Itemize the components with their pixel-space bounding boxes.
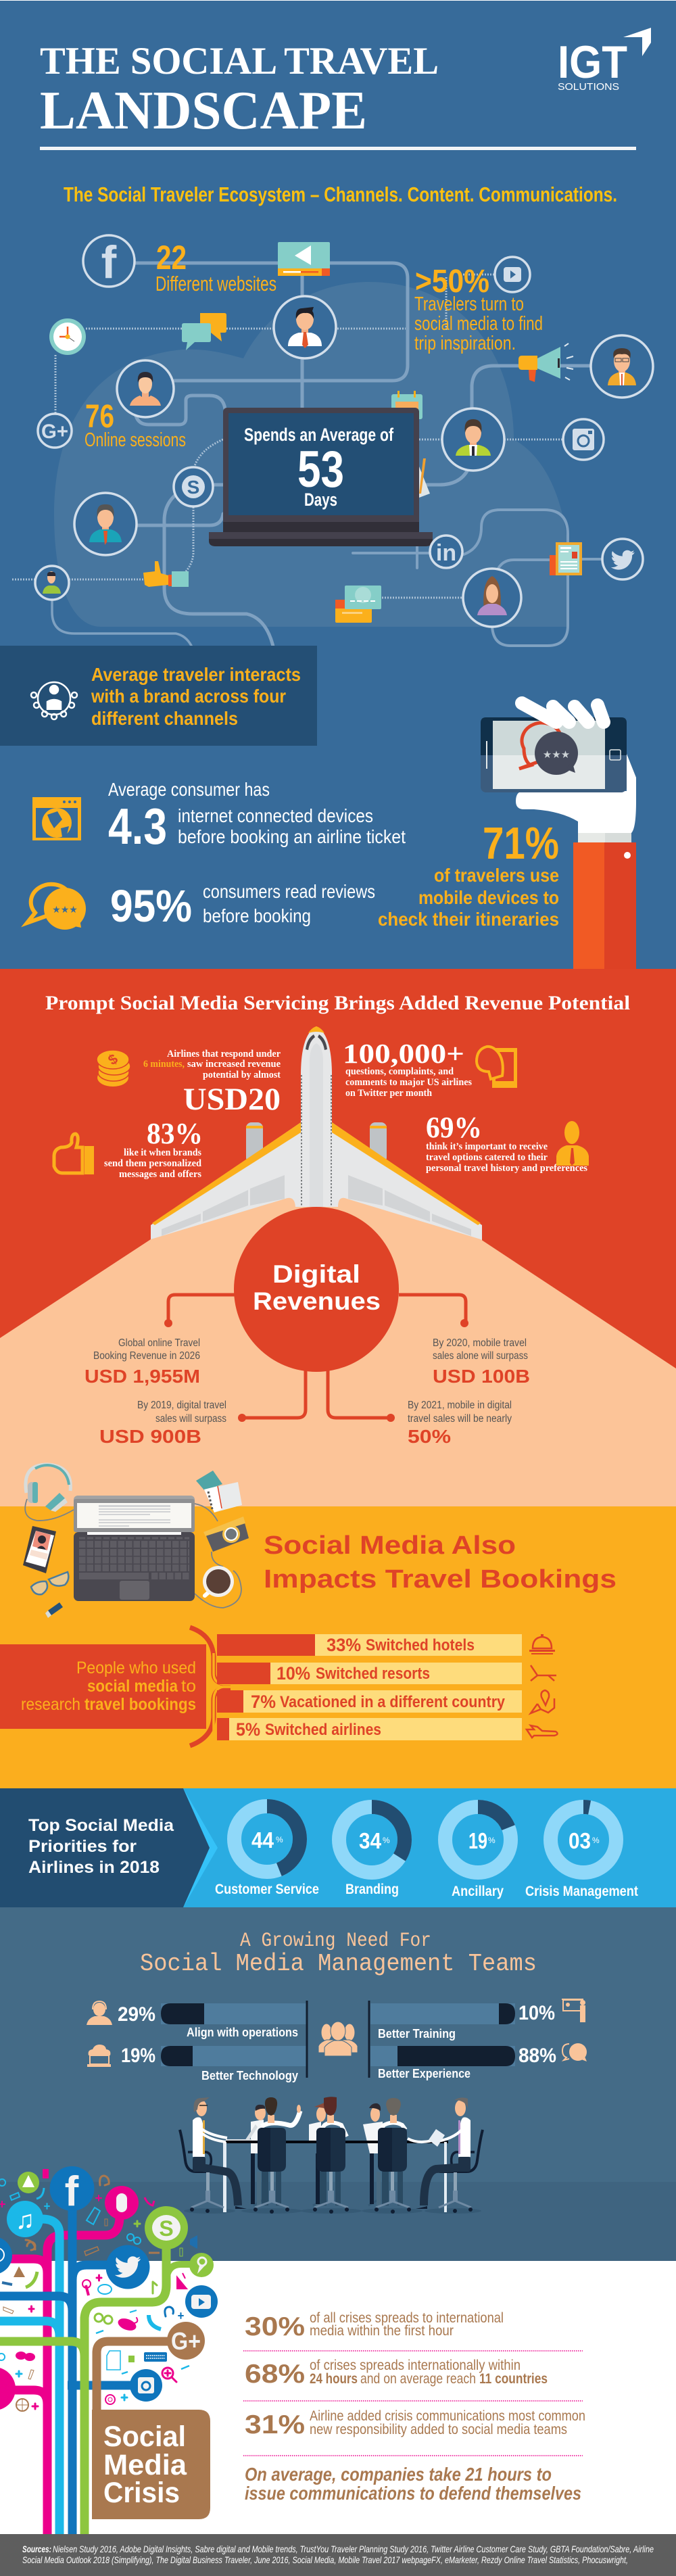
- icon: chat: [562, 2043, 587, 2061]
- footer: sources: [0, 2534, 676, 2576]
- icon: megaphone: [518, 343, 573, 382]
- icon: skype: S: [159, 2216, 174, 2241]
- heading: Top Social Media: [28, 1816, 174, 1835]
- label: social media crisis: Social: [103, 2420, 186, 2453]
- icon: mouse: [105, 2186, 139, 2220]
- icon: video play: [185, 2285, 218, 2318]
- donut: crisis management 03%: %: [592, 1836, 600, 1845]
- icon: google plus: [167, 2322, 205, 2360]
- bar: switched resorts: 10%: [276, 1663, 310, 1684]
- bar: align with operations 29%: 29%: [118, 2003, 155, 2026]
- stat: 83%: send them personalized: [104, 1158, 202, 1169]
- icon: calendar: [391, 391, 422, 419]
- title: [40, 40, 636, 150]
- bar chart: switching behaviour: [217, 1634, 558, 1740]
- stat: 4.3 devices: before booking an airline ticket: [178, 826, 406, 847]
- stat: 4.3 devices: 4.3: [108, 798, 167, 855]
- callout: who used social media: People who used: [76, 1659, 196, 1677]
- illustration: desk flat lay: [23, 1464, 249, 1618]
- icon: headphones: [26, 1464, 70, 1512]
- icon: cloud laptop: [87, 2045, 111, 2067]
- icon: review bubbles: [27, 884, 86, 930]
- icon: facebook circle: f: [101, 237, 117, 288]
- stat: 22 different websites: Different websites: [155, 272, 276, 295]
- icon: left pink circle: [0, 2367, 16, 2410]
- stat: 30%: of all crises spreads to international: [310, 2310, 504, 2326]
- stat: 95% read reviews: before booking: [203, 905, 311, 926]
- connector lines: [12, 263, 603, 649]
- donut: branding 34%: %: [383, 1836, 390, 1845]
- stat: 71% mobile: of travelers use: [434, 865, 559, 886]
- table: [225, 2141, 448, 2143]
- bar: vacationed elsewhere: 7%: [251, 1692, 276, 1712]
- stat: USD 1,955M: Booking Revenue in 2026: [93, 1350, 200, 1362]
- stat: 100,000+: on Twitter per month: [345, 1088, 433, 1099]
- stat: USD 900B: [99, 1400, 226, 1447]
- icon: boarding cards: [335, 586, 381, 623]
- title: LANDSCAPE: [40, 81, 367, 141]
- icon: music: ♫: [16, 2206, 34, 2235]
- coffee cup: [203, 1566, 234, 1597]
- stat: 31%: [245, 2408, 585, 2439]
- icon: linkedin circle: [430, 535, 462, 568]
- bar: better experience 88%: 88%: [518, 2045, 556, 2067]
- stat: 95% read reviews: 95%: [110, 881, 192, 932]
- heading: A Growing Need For: [240, 1930, 431, 1953]
- icon: twitter: [105, 2245, 150, 2289]
- stat: 50%: 50%: [408, 1426, 451, 1447]
- stat: 68%: 24 hours: [310, 2371, 358, 2387]
- illustration: hand holding phone: [481, 703, 636, 969]
- donut: branding 34%: [339, 1807, 404, 1897]
- icon: support agent: [87, 2001, 112, 2025]
- callout: four channels: [0, 646, 317, 746]
- panel: social media priorities: [0, 1788, 676, 1907]
- stat: 95% read reviews: [27, 881, 375, 932]
- person: man in green: [442, 408, 504, 471]
- stat: 83%: messages and offers: [119, 1169, 201, 1180]
- bar: switched hotels: 33%: [327, 1635, 361, 1655]
- statement: 21 hours: [245, 2464, 581, 2504]
- donut: customer service 44%: Customer Service: [215, 1882, 319, 1897]
- heading: Social Media Also: [264, 1531, 516, 1560]
- stat: USD 1,955M: [84, 1337, 200, 1387]
- label: social media crisis: Crisis: [103, 2477, 180, 2509]
- icon: skype: [145, 2206, 188, 2249]
- bar: switched resorts: [217, 1663, 522, 1684]
- chair and person: back right: [375, 2098, 411, 2214]
- logo: IGT Solutions: SOLUTIONS: [558, 81, 619, 93]
- bar: better training 10%: [370, 1999, 585, 2041]
- panel: travel bookings: [0, 1464, 676, 1788]
- stat: 69%: think it’s important to receive: [426, 1141, 548, 1152]
- heading: [140, 1930, 537, 1978]
- panel: header and ecosystem: [0, 1, 676, 969]
- icon: facebook: [50, 2166, 95, 2215]
- donut: crisis management 03%: Crisis Management: [525, 1884, 638, 1899]
- heading: Prompt Social Media Servicing Brings Added Revenue Potential: [45, 992, 630, 1014]
- stat: 71% mobile: mobile devices to: [418, 887, 559, 908]
- digital revenues circle: Digital: [272, 1260, 360, 1288]
- callout: who used social media: research: [21, 1695, 80, 1714]
- stat: USD20: Airlines that respond under: [167, 1049, 281, 1059]
- illustration: hand holding phone: ★★★: [543, 749, 570, 761]
- callout: four channels: with a brand across four: [91, 686, 286, 707]
- icon: twitter circle: [602, 539, 643, 579]
- stat: 68%: 68%: [245, 2360, 305, 2389]
- stat: 68%: 11 countries: [479, 2371, 548, 2387]
- heading: Priorities for: [28, 1837, 137, 1856]
- icon: network person: [31, 682, 77, 719]
- icon: thumbs up: [143, 561, 189, 587]
- donut: customer service 44%: [215, 1807, 319, 1897]
- donut: customer service 44%: %: [276, 1835, 283, 1844]
- usb stick: [45, 1602, 63, 1618]
- donut: ancillary 19%: %: [488, 1836, 496, 1845]
- title: THE SOCIAL TRAVEL: [40, 40, 439, 82]
- stat: 69%: 69%: [426, 1111, 482, 1144]
- stat: 31%: 31%: [245, 2410, 305, 2439]
- stat: 83%: 83%: [147, 1117, 203, 1150]
- icon: instagram circle: [563, 419, 604, 460]
- stat: USD 1,955M: Global online Travel: [118, 1337, 200, 1349]
- icon: browser globe: [32, 797, 81, 840]
- stat: 76 online sessions: [84, 399, 186, 451]
- chair and person: back centre: [313, 2097, 349, 2214]
- stat: 50%: [408, 1400, 512, 1447]
- stat: 68%: [245, 2358, 548, 2389]
- stat: USD20: USD20: [183, 1082, 281, 1117]
- stat: USD20: saw increased revenue: [187, 1059, 281, 1070]
- stat: USD 100B: sales alone will surpass: [433, 1350, 528, 1362]
- bar: better technology 19%: [87, 2045, 306, 2082]
- bar: better technology 19%: 19%: [121, 2045, 155, 2067]
- icon: coins: $: [105, 1051, 121, 1068]
- stat: 100,000+: questions, complaints, and: [345, 1066, 454, 1077]
- stat: 4.3 devices: Average consumer has: [108, 779, 270, 800]
- laptop with average days: [209, 408, 433, 546]
- bar: better experience 88%: Better Experience: [378, 2067, 470, 2080]
- stat: 22 different websites: 22: [156, 239, 187, 277]
- person: woman right: [463, 569, 521, 627]
- stat: 30%: 30%: [245, 2312, 305, 2341]
- stat: over 50 percent: social media to find: [414, 313, 543, 335]
- icon: music: [7, 2201, 43, 2237]
- person: man in teal: [74, 493, 137, 555]
- bar: align with operations 29%: [87, 2001, 306, 2039]
- donut: branding 34%: Branding: [345, 1882, 399, 1897]
- stat: 71% mobile: 71%: [483, 818, 559, 869]
- bar: better technology 19%: Better Technology: [201, 2069, 298, 2082]
- laptop: [74, 1496, 195, 1601]
- stat: 30%: [245, 2310, 504, 2341]
- icon: clock: [49, 318, 86, 355]
- stat: 69%: personal travel history and preferences: [426, 1163, 587, 1174]
- stat: USD 900B: USD 900B: [99, 1426, 201, 1447]
- ecosystem network diagram: [12, 235, 653, 649]
- stat: over 50 percent: Travelers turn to: [414, 293, 524, 315]
- icon: facebook: f: [65, 2168, 79, 2215]
- bar divider lines: [307, 2001, 369, 2078]
- icon: location pin: [189, 2253, 214, 2277]
- stat: 76 online sessions: 76: [85, 399, 114, 435]
- bar: switched airlines: Switched airlines: [265, 1721, 381, 1739]
- callout: who used social media: to: [181, 1677, 196, 1696]
- illustration: airplane: [151, 1026, 482, 1244]
- icon: google plus circle: [38, 414, 72, 448]
- logo: IGT Solutions: [558, 28, 651, 93]
- icon: hotel bell: [529, 1634, 555, 1654]
- icon: notepad and pencil: [419, 458, 430, 498]
- callout: who used social media: travel bookings: [84, 1695, 196, 1714]
- bar: switched hotels: [217, 1634, 522, 1656]
- stat: over 50 percent: [414, 264, 543, 354]
- smartphone: [23, 1526, 56, 1573]
- tree branches: [0, 2210, 196, 2534]
- bar: switched resorts: Switched resorts: [316, 1665, 430, 1683]
- glasses: [31, 1572, 68, 1594]
- stat: USD 900B: By 2019, digital travel: [137, 1400, 226, 1411]
- laptop with average days: Days: [304, 490, 337, 510]
- stat: 95% read reviews: consumers read reviews: [203, 881, 375, 902]
- stat: 76 online sessions: Online sessions: [84, 429, 186, 451]
- person: seated left: [180, 2097, 247, 2213]
- donut: branding 34%: 34: [359, 1828, 382, 1853]
- stat: 50%: travel sales will be nearly: [408, 1413, 512, 1425]
- statement: 21 hours: issue communications to defend themselves: [245, 2483, 581, 2504]
- stat: 30%: media within the first hour: [310, 2323, 454, 2339]
- stat: USD20: potential by almost: [203, 1070, 281, 1080]
- icon: person in tie: [556, 1121, 589, 1166]
- stat: USD 100B: USD 100B: [433, 1366, 530, 1387]
- heading: Airlines in 2018: [28, 1858, 160, 1877]
- stat: 4.3 devices: [32, 779, 406, 855]
- donut: ancillary 19%: 19: [468, 1828, 487, 1853]
- book and notepad: [196, 1471, 242, 1512]
- stat: 100,000+: comments to major US airlines: [345, 1077, 472, 1088]
- icon: instagram: [130, 2369, 162, 2402]
- callout: four channels: different channels: [91, 708, 238, 729]
- label: social media crisis: Media: [103, 2449, 187, 2481]
- bar: better experience 88%: [370, 2043, 587, 2080]
- icon: presenter: [562, 1999, 585, 2022]
- icon: skype circle: S: [187, 477, 199, 498]
- heading: [264, 1531, 617, 1594]
- stat: 83%: like it when brands: [124, 1147, 201, 1158]
- donut: ancillary 19%: Ancillary: [452, 1884, 504, 1899]
- stat: USD 900B: sales will surpass: [155, 1413, 226, 1425]
- stat: 100,000+: 100,000+: [343, 1038, 464, 1069]
- stat: 71% mobile: [378, 818, 559, 930]
- stat: 83%: [54, 1117, 203, 1180]
- stat: over 50 percent: >50%: [415, 264, 489, 300]
- stat: USD 1,955M: USD 1,955M: [84, 1366, 200, 1387]
- callout: who used social media: social media: [87, 1677, 178, 1696]
- stat: 68%: and on average reach: [360, 2371, 476, 2387]
- bar: vacationed elsewhere: Vacationed in a different country: [280, 1693, 506, 1711]
- bar: align with operations 29%: Align with operations: [187, 2026, 298, 2039]
- illustration: team meeting: [180, 2097, 483, 2214]
- person: man with glasses: [591, 335, 653, 398]
- bar: better training 10%: 10%: [518, 2002, 555, 2024]
- icon: airplane: [527, 1725, 558, 1738]
- dividers: [243, 2351, 583, 2456]
- icon: phone and speech bubble: [477, 1047, 517, 1088]
- stat: 31%: new responsibility added to social media teams: [310, 2422, 567, 2437]
- icon: google plus circle: G+: [41, 421, 68, 443]
- stat: 100,000+: [343, 1038, 517, 1099]
- chair and person: back left: [254, 2097, 301, 2214]
- stat: USD20: 6 minutes,: [143, 1059, 185, 1070]
- device cables: [25, 1499, 241, 1608]
- heading: Impacts Travel Bookings: [264, 1565, 617, 1594]
- icon: skype circle: [174, 467, 213, 506]
- digital revenues circle: [234, 1207, 399, 1372]
- bar: switched airlines: [217, 1718, 522, 1740]
- stat: 50%: By 2021, mobile in digital: [408, 1400, 512, 1411]
- icon: linkedin circle: in: [436, 540, 456, 566]
- donut: crisis management 03%: 03: [569, 1828, 591, 1853]
- icon: warning circle: [18, 2172, 39, 2193]
- stat: 68%: of crises spreads internationally within: [310, 2358, 521, 2373]
- laptop with average days: 53: [297, 441, 344, 498]
- small tree icons: [0, 2169, 197, 2411]
- panel: social media crisis: [0, 2166, 676, 2534]
- statement: 21 hours: On average, companies take 21 hours to: [245, 2464, 552, 2485]
- stat: USD 100B: [433, 1337, 530, 1387]
- donut: crisis management 03%: [525, 1807, 638, 1899]
- digital revenues circle: Revenues: [253, 1287, 381, 1315]
- person: small man striped: [35, 566, 69, 600]
- logo: IGT Solutions: IGT: [558, 37, 627, 88]
- icon: chat bubbles: [182, 313, 226, 350]
- callout: four channels: Average traveler interacts: [91, 664, 301, 685]
- icon: newspaper: [550, 542, 582, 575]
- panel: digital revenues: [0, 1198, 676, 1508]
- panel: management teams: [0, 1907, 676, 2261]
- icon: review bubbles: ★★★: [52, 904, 78, 915]
- icon: coins: [97, 1050, 130, 1087]
- footer: sources: Sources:: [22, 2544, 51, 2554]
- icon: map pin: [531, 1690, 554, 1713]
- stat: 69%: travel options catered to their: [426, 1152, 548, 1163]
- stat: 71% mobile: check their itineraries: [378, 909, 559, 930]
- heading: [28, 1816, 174, 1877]
- stat: 31%: Airline added crisis communications most common: [310, 2408, 585, 2424]
- stat: over 50 percent: trip inspiration.: [414, 333, 516, 354]
- icon: left search circle: [0, 2237, 12, 2274]
- stat: USD 100B: By 2020, mobile travel: [433, 1337, 527, 1349]
- people across the table: [226, 2103, 383, 2205]
- heading: Social Media Management Teams: [140, 1950, 537, 1978]
- label: social media crisis: [92, 2410, 210, 2519]
- stat: 4.3 devices: internet connected devices: [178, 805, 373, 826]
- icon: video play circle: [495, 257, 530, 292]
- person: woman left: [117, 360, 174, 417]
- bar: vacationed elsewhere: [217, 1690, 522, 1713]
- bar: switched airlines: 5%: [236, 1719, 260, 1740]
- icon: lounge chair: [531, 1665, 556, 1681]
- donut: ancillary 19%: [445, 1807, 511, 1899]
- icon: video player: [278, 242, 330, 276]
- panel: revenue potential: [0, 969, 676, 1375]
- icon: google plus: G+: [171, 2327, 201, 2355]
- icon: facebook circle: [83, 235, 135, 288]
- person: seated right: [408, 2097, 483, 2213]
- icon: group of people: [318, 2022, 358, 2056]
- stat: USD20: [97, 1049, 281, 1117]
- donut: customer service 44%: 44: [251, 1828, 274, 1853]
- laptop with average days: Spends an Average of: [244, 425, 394, 445]
- stat: 69%: [426, 1111, 589, 1174]
- stat: 22 different websites: [155, 239, 276, 295]
- connector lines: [164, 1295, 468, 1422]
- person: businessman top: [274, 296, 336, 358]
- icon: thumbs up outline: [54, 1134, 94, 1174]
- callout: who used social media: [0, 1627, 231, 1746]
- camera: [203, 1517, 249, 1552]
- bar: better training 10%: Better Training: [378, 2027, 456, 2041]
- social media tree: [0, 2166, 218, 2534]
- bar: switched hotels: Switched hotels: [366, 1636, 475, 1654]
